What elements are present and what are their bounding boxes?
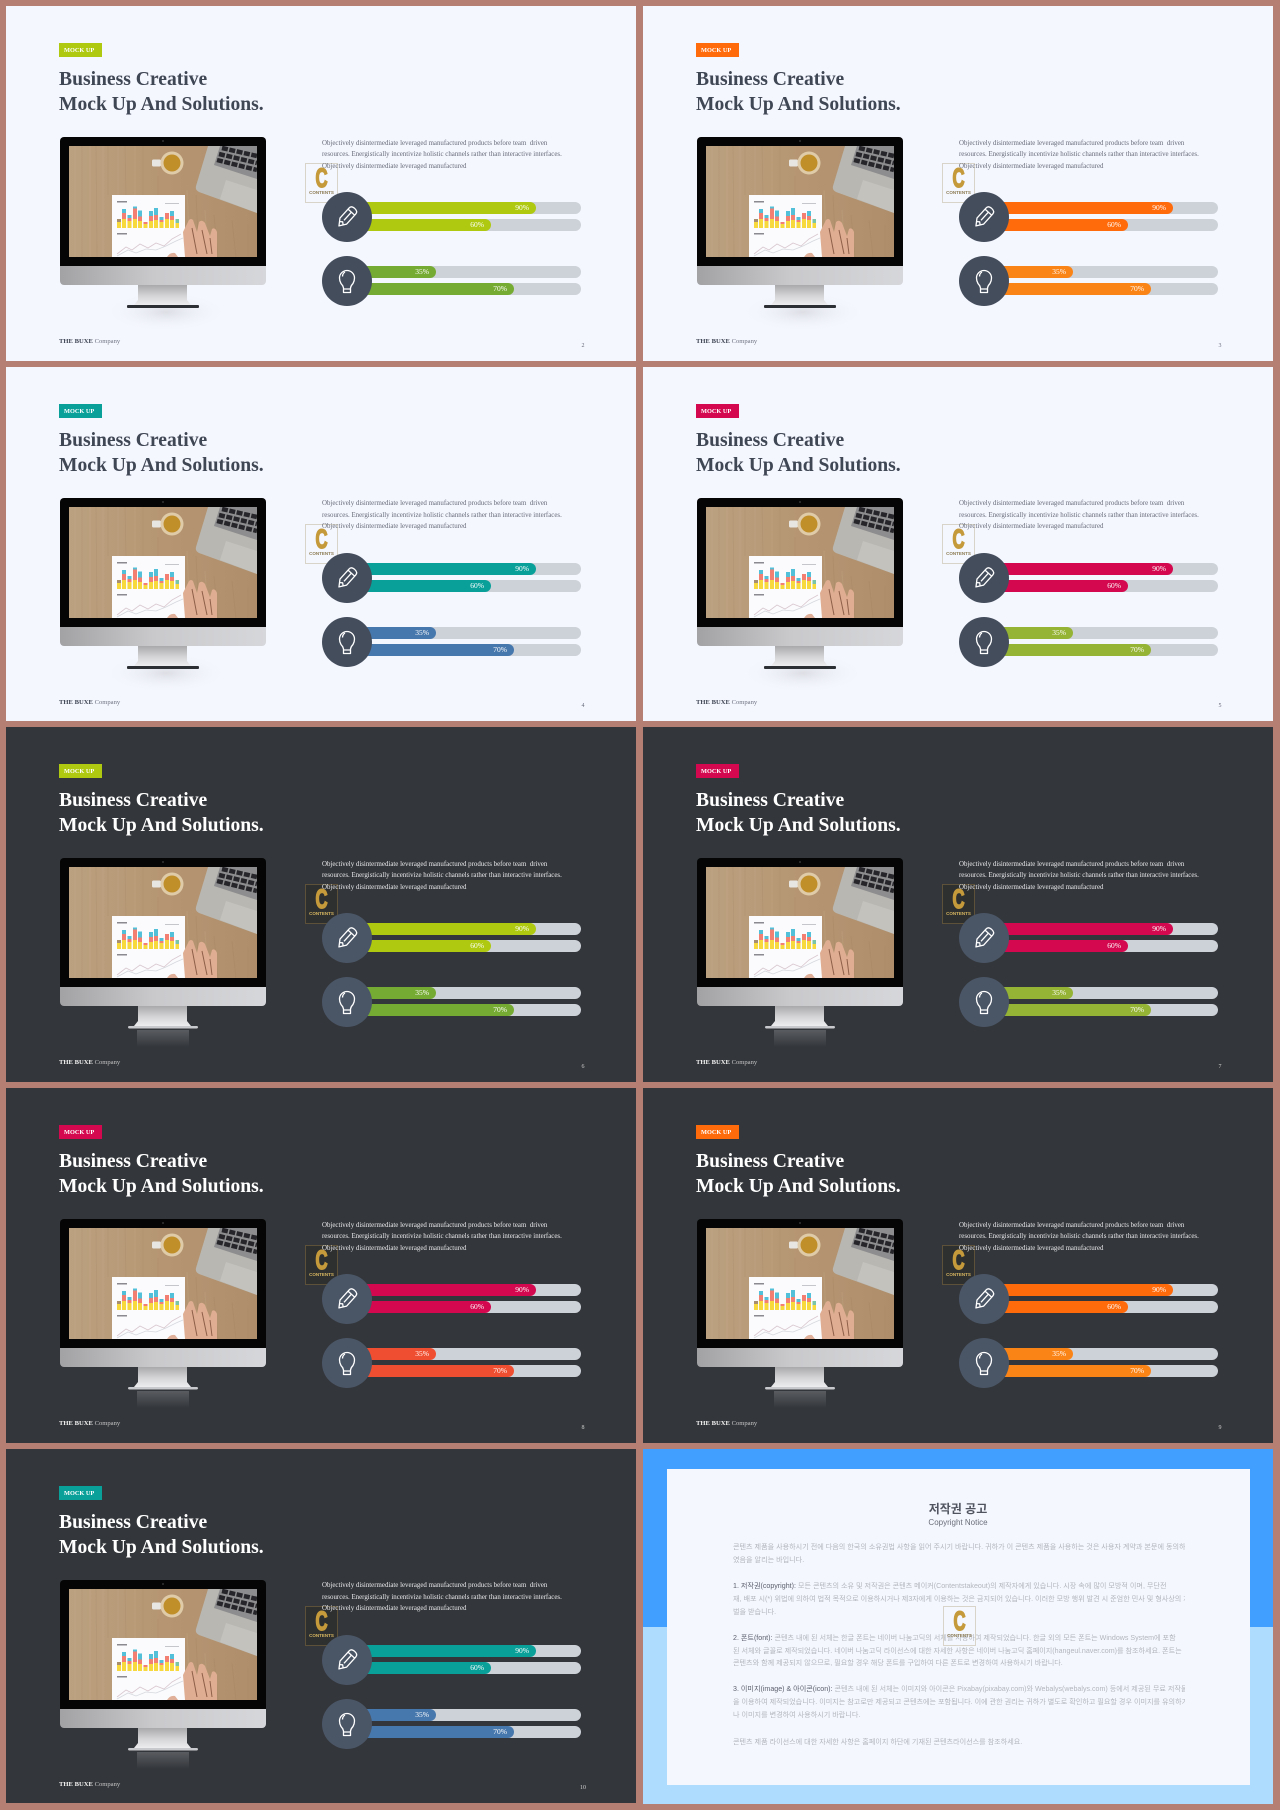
notice text: 였음을 알리는 바입니다. — [733, 1556, 804, 1564]
body text — [322, 860, 562, 890]
bar: 90 percent: 90% — [515, 203, 529, 212]
bar: 70 percent — [341, 1365, 581, 1377]
panel: slide 10 dark teal — [6, 1448, 636, 1803]
bar: 70 percent — [978, 283, 1218, 295]
bar: 70 percent — [341, 283, 581, 295]
bar: 35 percent: 35% — [415, 267, 429, 276]
panel: slide 3 light orange — [643, 6, 1273, 360]
watermark logo — [943, 1606, 976, 1646]
heading: Mock Up And Solutions. — [59, 815, 264, 836]
badge: mock up — [59, 1486, 102, 1500]
bar: 60 percent: 60% — [470, 1302, 484, 1311]
bar: 60 percent: 60% — [470, 1662, 484, 1672]
illustration: desktop monitor — [60, 1219, 266, 1404]
badge: mock up: MOCK UP — [64, 1129, 94, 1136]
icon: light bulb — [322, 1698, 372, 1748]
notice text: 1. 저작권(copyright): 모든 콘텐츠의 소유 및 저작권은 콘텐츠 메이커(Contentstakeout)의 제작자에게 있습니다. 시장 속에 많이 모방적 이며, 무단전 — [733, 1582, 1166, 1590]
bar: 70 percent: 70% — [1130, 644, 1144, 654]
body text — [322, 1222, 562, 1252]
footer brand: THE BUXE Company — [696, 1059, 757, 1066]
bar: 60 percent: 60% — [1107, 1302, 1121, 1311]
bar: 90 percent — [341, 562, 581, 574]
bar: 70 percent: 70% — [493, 284, 507, 293]
body text: Objectively disintermediate leveraged manufactured — [322, 523, 466, 530]
body text: Objectively disintermediate leveraged manufactured products before team driven — [322, 500, 547, 507]
footer brand: THE BUXE Company — [696, 698, 757, 706]
panel: slide 2 light lime — [6, 6, 636, 360]
body text: Objectively disintermediate leveraged manufactured products before team driven — [959, 500, 1184, 507]
icon: pencil — [322, 1634, 372, 1684]
badge: mock up: MOCK UP — [64, 408, 94, 414]
body text: resources. Energistically incentivize holistic channels rather than interactive interfaces. — [959, 512, 1199, 518]
bar: 70 percent: 70% — [1130, 1366, 1144, 1375]
bar: 70 percent — [978, 1365, 1218, 1377]
notice text — [643, 1449, 1273, 1803]
icon: light bulb — [322, 256, 372, 306]
body text: Objectively disintermediate leveraged manufactured — [959, 884, 1103, 890]
icon: pencil — [959, 913, 1009, 963]
illustration: desktop monitor — [697, 137, 903, 321]
bar: 90 percent — [978, 562, 1218, 574]
footer brand: THE BUXE Company — [696, 1420, 757, 1427]
background: blue upper half — [643, 1449, 1273, 1627]
watermark logo — [942, 163, 975, 203]
body text: resources. Energistically incentivize holistic channels rather than interactive interfaces. — [322, 1233, 562, 1240]
bar: 70 percent: 70% — [493, 1366, 507, 1375]
notice text: 콘텐츠와 함께 제공되지 않으므로, 필요할 경우 해당 폰트를 구입하여 다른 폰트로 변경하여 사용하시기 바랍니다. — [733, 1659, 1063, 1667]
bar: 35 percent — [978, 987, 1218, 999]
watermark logo: CONTENTS — [946, 190, 971, 195]
illustration: desktop monitor — [687, 1207, 927, 1417]
heading: Mock Up And Solutions. — [696, 94, 901, 115]
watermark logo: C — [953, 1606, 966, 1636]
page number: 10 — [580, 1785, 586, 1791]
heading — [696, 790, 901, 836]
page number: 7 — [1218, 1064, 1222, 1070]
watermark logo — [305, 524, 338, 564]
heading — [696, 430, 901, 476]
bar: 60 percent — [341, 219, 581, 231]
watermark logo — [942, 524, 975, 564]
bar: 70 percent — [341, 1004, 581, 1016]
badge: mock up — [696, 404, 739, 418]
body text: Objectively disintermediate leveraged manufactured products before team driven — [322, 860, 547, 868]
bar: 60 percent — [341, 1662, 581, 1674]
body text: resources. Energistically incentivize holistic channels rather than interactive interfaces. — [322, 1594, 562, 1600]
panel: slide 9 dark orange — [643, 1088, 1273, 1442]
icon: pencil — [959, 1274, 1009, 1324]
bar: 90 percent: 90% — [515, 1646, 529, 1654]
heading — [59, 69, 264, 115]
badge: mock up: MOCK UP — [701, 47, 731, 54]
badge: mock up — [59, 404, 102, 418]
body text: resources. Energistically incentivize holistic channels rather than interactive interfaces. — [322, 872, 562, 879]
notice text: 콘텐츠 제품을 사용하시기 전에 다음의 한국의 소유권법 사항을 읽어 주시기 바랍니다. 귀하가 이 콘텐츠 제품을 사용하는 것은 사용자 계약과 본문에 동의하 — [733, 1543, 1185, 1551]
watermark logo: CONTENTS — [947, 1633, 972, 1638]
heading: Business Creative — [59, 69, 207, 90]
bar: 60 percent — [341, 940, 581, 952]
heading — [59, 1510, 264, 1560]
bar: 35 percent — [978, 626, 1218, 638]
watermark logo: CONTENTS — [309, 550, 334, 556]
badge: mock up: MOCK UP — [701, 408, 731, 414]
notice text: 재, 배포 시(*) 위법에 의하여 법적 목적으로 이용하시거나 제3자에게 이용하는 것은 금지되어 있습니다. 이러한 모방 행위 발견 시 준엄한 민사 및 형사상의 처 — [733, 1595, 1185, 1603]
bar: 90 percent: 90% — [515, 564, 529, 572]
bar: 35 percent — [978, 1348, 1218, 1360]
illustration: desktop monitor — [697, 498, 903, 682]
page number: 2 — [582, 342, 584, 348]
bar: 35 percent — [341, 987, 581, 999]
body text — [959, 860, 1199, 890]
bar: 60 percent: 60% — [470, 941, 484, 950]
heading: Business Creative — [696, 1151, 844, 1172]
bar: 60 percent — [978, 219, 1218, 231]
footer brand: THE BUXE Company — [59, 1780, 120, 1788]
bar: 35 percent — [341, 266, 581, 278]
watermark logo — [942, 884, 975, 924]
watermark logo — [305, 1245, 338, 1285]
page number: 9 — [1218, 1424, 1222, 1430]
bar: 90 percent: 90% — [515, 924, 529, 933]
badge: mock up — [59, 1125, 102, 1139]
bar: 90 percent — [978, 923, 1218, 935]
body text: Objectively disintermediate leveraged manufactured — [959, 162, 1103, 170]
icon: light bulb — [322, 977, 372, 1027]
bar: 70 percent: 70% — [1130, 1005, 1144, 1014]
watermark logo: C — [315, 884, 328, 914]
heading: Mock Up And Solutions. — [59, 454, 264, 476]
footer brand: THE BUXE Company — [59, 1059, 120, 1066]
bar: 70 percent: 70% — [493, 1726, 507, 1736]
illustration: desktop monitor — [60, 858, 266, 1044]
bar: 60 percent: 60% — [1107, 580, 1121, 590]
notice text: 된 서체와 글꼴로 제작되었습니다. 네이버 나눔고딕 라이선스에 대한 자세한 사항은 네이버 나눔고딕 홈페이지(hangeul.naver.com)를 참조하세요. 폰트는 — [733, 1647, 1182, 1655]
body text: resources. Energistically incentivize holistic channels rather than interactive interfaces. — [322, 151, 562, 158]
heading: Mock Up And Solutions. — [696, 815, 901, 836]
bar: 60 percent: 60% — [470, 580, 484, 590]
badge: mock up — [696, 1125, 739, 1139]
watermark logo: CONTENTS — [946, 550, 971, 556]
heading: Mock Up And Solutions. — [696, 1176, 901, 1197]
heading: Mock Up And Solutions. — [696, 454, 901, 476]
notice text: 나 이미지를 변경하여 사용하시기 바랍니다. — [733, 1711, 860, 1719]
watermark logo: CONTENTS — [309, 190, 334, 195]
body text: resources. Energistically incentivize holistic channels rather than interactive interfaces. — [322, 512, 562, 518]
body text: Objectively disintermediate leveraged manufactured products before team driven — [959, 140, 1184, 146]
badge: mock up — [696, 43, 739, 57]
heading: Business Creative — [696, 790, 844, 811]
bar: 70 percent — [341, 1726, 581, 1738]
bar: 90 percent — [341, 923, 581, 935]
bar: 35 percent: 35% — [1052, 267, 1066, 276]
footer brand: THE BUXE Company — [696, 338, 757, 345]
heading: Business Creative — [696, 69, 844, 90]
icon: light bulb — [322, 617, 372, 667]
watermark logo: C — [952, 884, 965, 914]
body text: Objectively disintermediate leveraged manufactured products before team driven — [959, 860, 1184, 868]
watermark logo: CONTENTS — [309, 1632, 334, 1638]
body text — [322, 140, 562, 170]
watermark logo — [305, 884, 338, 924]
watermark logo — [942, 1245, 975, 1285]
panel: slide 5 light crimson — [643, 366, 1273, 721]
icon: pencil — [322, 1274, 372, 1324]
bar: 35 percent: 35% — [415, 1710, 429, 1718]
body text: Objectively disintermediate leveraged manufactured — [959, 523, 1103, 530]
bar: 90 percent — [341, 1284, 581, 1296]
body text: Objectively disintermediate leveraged manufactured — [959, 1244, 1103, 1252]
bar: 90 percent: 90% — [1152, 564, 1166, 572]
bar: 90 percent: 90% — [515, 1285, 529, 1294]
watermark logo — [305, 163, 338, 203]
watermark logo: CONTENTS — [309, 1272, 334, 1277]
watermark logo: C — [952, 524, 965, 554]
illustration: desktop monitor — [697, 858, 903, 1044]
icon: pencil — [322, 913, 372, 963]
watermark logo: C — [952, 1245, 965, 1275]
panel: slide 4 light teal — [6, 366, 636, 721]
body text: resources. Energistically incentivize holistic channels rather than interactive interfaces. — [959, 872, 1199, 879]
heading: Business Creative — [59, 1512, 207, 1532]
bar: 60 percent: 60% — [1107, 941, 1121, 950]
footer brand: THE BUXE Company — [59, 1420, 120, 1427]
icon: light bulb — [959, 617, 1009, 667]
watermark logo: CONTENTS — [946, 1272, 971, 1277]
badge: mock up: MOCK UP — [701, 768, 731, 775]
heading: Mock Up And Solutions. — [59, 1176, 264, 1197]
bar: 90 percent — [341, 1644, 581, 1656]
page number: 3 — [1218, 342, 1222, 348]
body text: Objectively disintermediate leveraged manufactured products before team driven — [322, 140, 547, 146]
body text: resources. Energistically incentivize holistic channels rather than interactive interfaces. — [959, 1233, 1199, 1240]
body text: Objectively disintermediate leveraged manufactured products before team driven — [322, 1582, 547, 1589]
bar: 35 percent: 35% — [415, 628, 429, 636]
bar: 70 percent: 70% — [493, 644, 507, 654]
illustration: desktop monitor — [60, 498, 266, 682]
body text: Objectively disintermediate leveraged manufactured — [322, 1605, 466, 1612]
watermark logo: C — [315, 1606, 328, 1636]
footer brand: THE BUXE Company — [59, 338, 120, 345]
heading: Business Creative — [59, 430, 207, 450]
icon: pencil — [959, 192, 1009, 242]
heading — [59, 430, 264, 476]
bar: 35 percent — [341, 1708, 581, 1720]
bar: 70 percent — [341, 644, 581, 656]
illustration: desktop monitor — [50, 1568, 290, 1778]
watermark logo: C — [315, 1245, 328, 1275]
badge: mock up: MOCK UP — [64, 768, 94, 775]
watermark logo: CONTENTS — [946, 911, 971, 916]
badge: mock up — [59, 43, 102, 57]
bar: 35 percent: 35% — [1052, 1349, 1066, 1358]
icon: pencil — [322, 192, 372, 242]
body text: Objectively disintermediate leveraged manufactured products before team driven — [322, 1222, 547, 1228]
icon: pencil — [322, 553, 372, 603]
bar: 35 percent: 35% — [415, 1349, 429, 1358]
body text — [322, 500, 562, 530]
bar: 35 percent — [978, 266, 1218, 278]
body text — [959, 140, 1199, 170]
bar: 60 percent — [978, 580, 1218, 592]
heading: Mock Up And Solutions. — [59, 1536, 264, 1558]
bar: 60 percent — [341, 580, 581, 592]
watermark logo: C — [952, 163, 965, 193]
body text: Objectively disintermediate leveraged manufactured — [322, 1244, 466, 1252]
panel: slide 8 dark crimson and red — [6, 1088, 636, 1442]
badge: mock up — [59, 764, 102, 778]
panel: copyright notice — [643, 1449, 1273, 1804]
notice text: 3. 이미지(image) & 아이콘(icon): 콘텐츠 내에 된 서체는 이미지와 아이콘은 Pixabay(pixabay.com)와 Webalys(webalys.com) 등에서 제공된 무료 저작물 — [733, 1685, 1185, 1693]
watermark logo: C — [315, 524, 328, 554]
bar: 70 percent: 70% — [1130, 284, 1144, 293]
bar: 90 percent — [341, 202, 581, 214]
heading — [696, 1149, 901, 1199]
bar: 90 percent — [978, 202, 1218, 214]
watermark logo — [305, 1606, 338, 1646]
page number: 6 — [582, 1064, 584, 1070]
body text — [959, 1220, 1199, 1254]
badge: mock up: MOCK UP — [64, 47, 94, 54]
icon: light bulb — [959, 1338, 1009, 1388]
bar: 60 percent — [978, 1301, 1218, 1313]
bar: 60 percent: 60% — [1107, 220, 1121, 229]
bar: 60 percent: 60% — [470, 220, 484, 229]
notice subtitle: Copyright Notice — [928, 1518, 988, 1526]
heading — [696, 69, 901, 115]
body text: resources. Energistically incentivize holistic channels rather than interactive interfaces. — [959, 151, 1199, 158]
icon: pencil — [959, 553, 1009, 603]
heading: Business Creative — [59, 790, 207, 811]
bar: 60 percent — [341, 1301, 581, 1313]
bar: 35 percent: 35% — [1052, 988, 1066, 997]
heading: Business Creative — [696, 430, 844, 450]
heading: Mock Up And Solutions. — [59, 94, 264, 115]
watermark logo: C — [315, 163, 328, 193]
heading — [59, 790, 264, 836]
badge: mock up: MOCK UP — [701, 1129, 731, 1136]
body text — [959, 500, 1199, 530]
body text — [322, 1580, 562, 1614]
bar: 70 percent — [978, 644, 1218, 656]
notice text: 2. 폰트(font): 콘텐츠 내에 된 서체는 한글 폰트는 네이버 나눔고딕의 서체를 사용하여 제작되었습니다. 한글 외의 모든 폰트는 Windows System에 포함 — [733, 1634, 1176, 1642]
panel: slide 7 dark crimson — [643, 727, 1273, 1082]
bar: 70 percent: 70% — [493, 1005, 507, 1014]
page number: 8 — [582, 1424, 584, 1430]
bar: 35 percent: 35% — [415, 988, 429, 997]
icon: light bulb — [959, 977, 1009, 1027]
body text: Objectively disintermediate leveraged manufactured — [322, 884, 466, 890]
bar: 90 percent: 90% — [1152, 203, 1166, 212]
panel: slide 6 dark lime — [6, 727, 636, 1082]
watermark logo: CONTENTS — [309, 911, 334, 916]
bar: 35 percent — [341, 626, 581, 638]
body text: Objectively disintermediate leveraged manufactured — [322, 162, 466, 170]
bar: 35 percent — [341, 1348, 581, 1360]
bar: 90 percent — [978, 1284, 1218, 1296]
heading: Business Creative — [59, 1151, 207, 1172]
illustration: desktop monitor — [60, 137, 266, 321]
page number: 4 — [582, 703, 584, 709]
icon: light bulb — [322, 1338, 372, 1388]
icon: light bulb — [959, 256, 1009, 306]
badge: mock up: MOCK UP — [64, 1490, 94, 1496]
bar: 35 percent: 35% — [1052, 628, 1066, 636]
notice text: 벌을 받습니다. — [733, 1608, 776, 1616]
notice text: 콘텐츠 제품 라이선스에 대한 자세한 사항은 홈페이지 하단에 기재된 콘텐츠라이선스를 참조하세요. — [733, 1738, 1022, 1746]
page number: 5 — [1218, 703, 1222, 709]
bar: 90 percent: 90% — [1152, 924, 1166, 933]
heading — [59, 1151, 264, 1197]
notice text: 을 이용하여 제작되었습니다. 이미지는 참고로만 제공되고 콘텐츠에는 포함됩니다. 이에 관한 권리는 귀하가 별도로 확인하고 필요할 경우 이미지를 유의하거 — [733, 1698, 1185, 1706]
bar: 70 percent — [978, 1004, 1218, 1016]
body text: Objectively disintermediate leveraged manufactured products before team driven — [959, 1222, 1184, 1228]
badge: mock up — [696, 764, 739, 778]
footer brand: THE BUXE Company — [59, 698, 120, 706]
bar: 90 percent: 90% — [1152, 1285, 1166, 1294]
notice title: 저작권 공고 — [929, 1502, 987, 1516]
notice card — [666, 1469, 1250, 1785]
bar: 60 percent — [978, 940, 1218, 952]
